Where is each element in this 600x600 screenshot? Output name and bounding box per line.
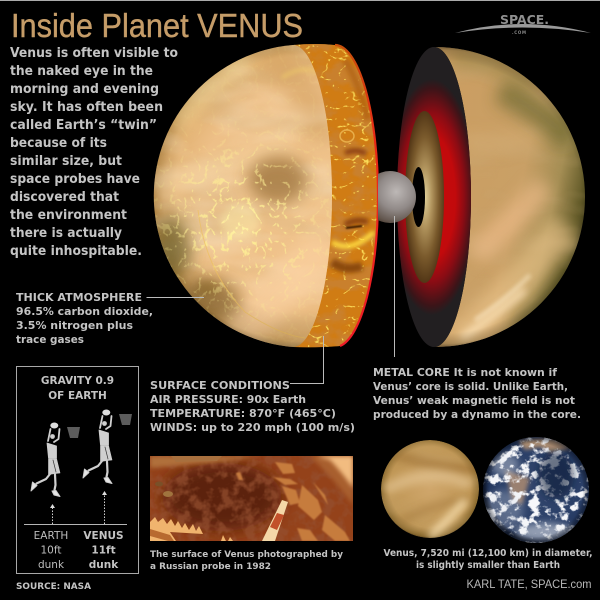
- callout: surface conditions: WINDS: up to 220 mph (100 m/s): [150, 422, 355, 434]
- intro text block: called Earth’s “twin”: [10, 118, 157, 133]
- intro text block: the environment: [10, 208, 127, 223]
- probe teeth: [150, 517, 203, 541]
- photo caption: The surface of Venus photographed by: [150, 550, 343, 560]
- small Earth globe: [483, 437, 589, 543]
- photo caption: [150, 550, 343, 572]
- venus dunk label: [83, 530, 124, 571]
- intro text block: the naked eye in the: [10, 64, 153, 79]
- photo: surface of Venus: [150, 456, 353, 541]
- leader lines: [146, 216, 394, 384]
- arrow: venus jump: [104, 495, 106, 524]
- logo: SPACE.com: [455, 13, 591, 35]
- arrow: earth jump: [52, 507, 54, 524]
- callout: surface conditions: [150, 380, 355, 434]
- globe caption: is slightly smaller than Earth: [416, 560, 560, 571]
- callout: metal core: Venus’ core is solid. Unlike Earth,: [373, 381, 568, 393]
- callout: metal core: produced by a dynamo in the core.: [373, 409, 581, 421]
- callout: thick atmosphere: 96.5% carbon dioxide,: [16, 306, 153, 318]
- earth dunk label: EARTH: [34, 530, 68, 542]
- title: Inside Planet VENUS: [11, 8, 303, 45]
- icon: venus hoop: [119, 414, 132, 425]
- rocks: [236, 462, 350, 541]
- venus dunk label: dunk: [89, 559, 119, 571]
- ruler: [262, 500, 288, 541]
- venus dunk label: 11ft: [91, 544, 116, 556]
- globe caption: [384, 548, 592, 571]
- right hemisphere of Venus: [398, 47, 585, 347]
- intro text block: quite inhospitable.: [10, 244, 142, 259]
- orange surface band: [294, 44, 377, 348]
- callout: metal core: [373, 367, 581, 421]
- icon: earth basketball player: [31, 422, 60, 496]
- gravity heading: GRAVITY 0.9: [41, 375, 114, 387]
- callout: thick atmosphere: trace gases: [16, 334, 84, 346]
- callout: thick atmosphere: [16, 292, 153, 346]
- intro text block: there is actually: [10, 226, 122, 241]
- brown outer core ring: [405, 111, 444, 283]
- callout: metal core: METAL CORE It is not known if: [373, 367, 557, 379]
- icon: venus basketball player: [83, 410, 112, 484]
- ground line: [24, 524, 127, 526]
- icon: earth hoop: [67, 427, 80, 438]
- hollow for the metal core: [412, 167, 425, 227]
- intro text block: Venus is often visible to: [10, 46, 178, 61]
- callout: surface conditions: TEMPERATURE: 870°F (465°C): [150, 408, 336, 420]
- callout: surface conditions: AIR PRESSURE: 90x Earth: [150, 394, 306, 406]
- gravity heading: [41, 375, 114, 402]
- red mantle cross-section: [397, 47, 471, 347]
- left hemisphere of Venus: [150, 40, 385, 350]
- earth dunk label: [34, 530, 68, 571]
- intro text block: sky. It has often been: [10, 100, 163, 115]
- panel: gravity comparison: [16, 366, 138, 574]
- earth dunk label: dunk: [38, 559, 65, 571]
- intro text block: similar size, but: [10, 154, 122, 169]
- earth dunk label: 10ft: [40, 544, 62, 556]
- credit: KARL TATE, SPACE.com: [466, 577, 592, 591]
- translucent atmosphere cap: [150, 40, 340, 350]
- intro text block: because of its: [10, 136, 107, 151]
- venus dunk label: VENUS: [83, 530, 124, 542]
- callout: thick atmosphere: THICK ATMOSPHERE: [16, 292, 142, 304]
- small Venus globe: [381, 440, 479, 538]
- callout: thick atmosphere: 3.5% nitrogen plus: [16, 320, 133, 332]
- cloud-covered outer shell: [436, 47, 585, 347]
- gravity heading: OF EARTH: [48, 390, 107, 402]
- red rim of the cut: [335, 45, 378, 346]
- photo caption: a Russian probe in 1982: [150, 562, 271, 572]
- logo: SPACE.com: .COM: [512, 30, 526, 35]
- globe caption: Venus, 7,520 mi (12,100 km) in diameter,: [384, 548, 592, 559]
- callout: metal core: Venus’ weak magnetic field is not: [373, 395, 575, 407]
- intro text block: space probes have: [10, 172, 140, 187]
- source: SOURCE: NASA: [16, 582, 91, 592]
- metal core sphere: [378, 171, 416, 223]
- logo: SPACE.com: SPACE.: [500, 13, 549, 27]
- intro text block: [10, 46, 178, 259]
- intro text block: discovered that: [10, 190, 119, 205]
- intro text block: morning and evening: [10, 82, 159, 97]
- callout: surface conditions: SURFACE CONDITIONS: [150, 380, 290, 392]
